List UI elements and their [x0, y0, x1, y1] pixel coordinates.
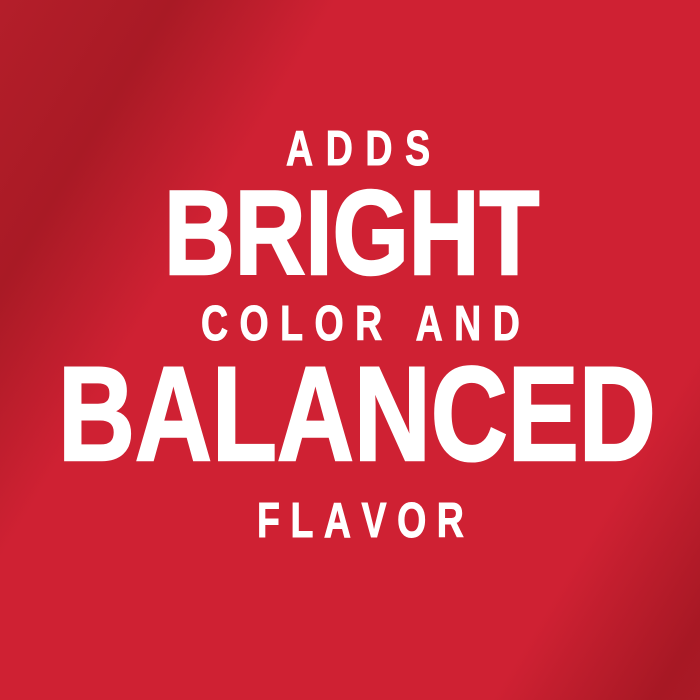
text: FLAVOR: FLAVOR	[257, 494, 474, 548]
heading: BRIGHT: BRIGHT	[164, 166, 539, 300]
heading: BALANCED: BALANCED	[58, 340, 656, 489]
text: COLOR AND: COLOR AND	[201, 297, 531, 351]
text: ADDS: ADDS	[286, 122, 443, 176]
